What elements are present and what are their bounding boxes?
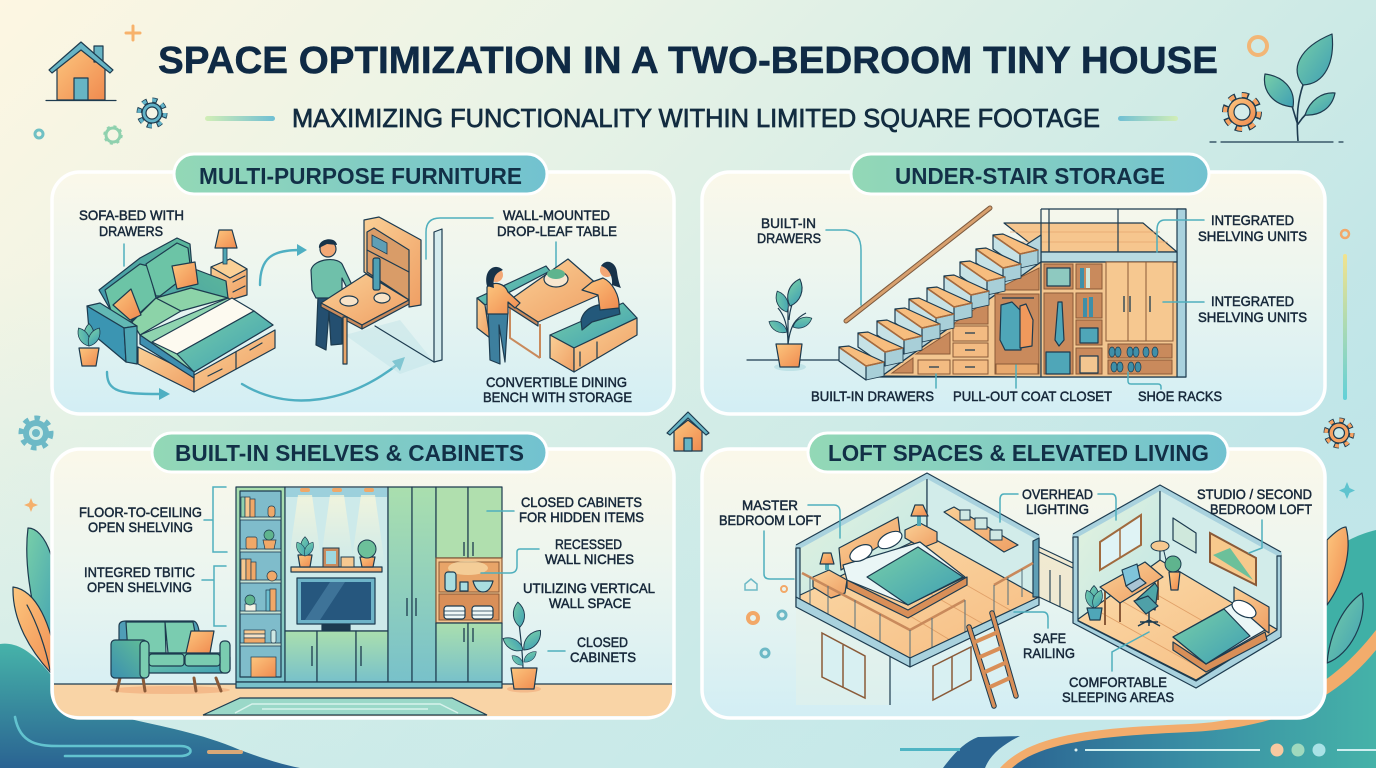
upper cabinets xyxy=(436,487,502,558)
icon: gear left xyxy=(21,418,51,448)
connecting bridge xyxy=(1039,547,1073,613)
icon: drop-leaf table xyxy=(321,258,409,364)
decorative bottom-left leaves xyxy=(13,528,60,680)
chair xyxy=(1134,583,1160,626)
bottom wave left xyxy=(0,644,300,768)
label: safe railing: SAFE xyxy=(1033,630,1066,646)
label: closed cabinets for hidden items: CLOSED CABINETS xyxy=(521,494,642,510)
connector studio xyxy=(1249,520,1262,553)
connector integrated 2 xyxy=(1163,301,1204,303)
plinth xyxy=(236,682,502,688)
bracket 2 xyxy=(202,566,226,626)
TV xyxy=(297,578,375,630)
heading pill: MULTI-PURPOSE FURNITURE xyxy=(199,163,522,189)
back nightstand and lamp xyxy=(905,505,937,548)
label: built-in drawers top: BUILT-IN xyxy=(761,215,816,231)
panel card xyxy=(702,172,1325,414)
title: SPACE OPTIMIZATION IN A TWO-BEDROOM TINY HOUSE xyxy=(158,40,1218,82)
floor line xyxy=(747,360,1186,377)
label: closed cabinets xyxy=(570,634,636,665)
label: studio / second bedroom loft: BEDROOM LOFT xyxy=(1210,501,1312,517)
decorative vertical bar xyxy=(1343,254,1347,400)
label: utilizing vertical wall space xyxy=(523,580,655,611)
label: wall-mounted table xyxy=(497,207,617,239)
bottom-left swoosh line xyxy=(15,717,190,756)
heading pill xyxy=(174,154,547,194)
icon: plus left xyxy=(24,498,38,512)
label: safe railing xyxy=(1023,630,1075,661)
panel: multi-purpose furniture xyxy=(52,154,674,414)
heading pill xyxy=(152,433,547,472)
alcove xyxy=(285,487,388,631)
panel card xyxy=(52,172,674,414)
panel: under-stair storage xyxy=(702,154,1325,414)
label: comfortable sleeping areas: COMFORTABLE xyxy=(1069,674,1167,690)
label: comfortable sleeping areas xyxy=(1062,674,1174,705)
label: integrated shelving 2: SHELVING UNITS xyxy=(1198,309,1307,325)
label: utilizing vertical wall space: WALL SPACE xyxy=(549,595,631,611)
label: master bedroom loft: BEDROOM LOFT xyxy=(719,512,821,528)
connector master 2 xyxy=(764,531,794,579)
label: convertible dining bench: BENCH WITH STORAGE xyxy=(483,389,632,405)
subtitle: MAXIMIZING FUNCTIONALITY WITHIN LIMITED SQUARE FOOTAGE xyxy=(292,103,1100,133)
bottom wave right xyxy=(900,630,1376,768)
rug xyxy=(203,698,487,715)
small icon cluster xyxy=(745,579,787,657)
label: studio / second bedroom loft: STUDIO / SECOND xyxy=(1197,486,1312,502)
label: integrated open shelving xyxy=(84,564,195,595)
icon: handrail xyxy=(846,208,990,321)
icon: sofa xyxy=(110,621,230,694)
icon: plant top-right xyxy=(1210,34,1343,142)
label: integrated shelving 2 xyxy=(1198,293,1307,325)
icon: ring top-right xyxy=(1249,37,1267,55)
label: overhead lighting: OVERHEAD xyxy=(1022,486,1093,502)
ladder xyxy=(969,613,1016,706)
floor line xyxy=(54,683,672,685)
icon: plus top-left xyxy=(126,26,140,40)
label: closed cabinets: CLOSED xyxy=(577,634,628,650)
icon: under-stair cabinets xyxy=(882,262,1177,377)
icon: green gear xyxy=(104,126,122,144)
icon: potted plant xyxy=(75,324,103,366)
icon: loft deck and railing xyxy=(865,209,1186,377)
label: shoe racks: SHOE RACKS xyxy=(1138,388,1222,404)
connector lighting xyxy=(1000,494,1116,522)
wall shelf xyxy=(944,507,1018,552)
icon: sofa bed xyxy=(87,238,275,392)
icon: small ring xyxy=(35,130,43,138)
tall cabinet xyxy=(388,487,436,682)
decorative bottom-right leaves xyxy=(1300,527,1376,768)
floor plant xyxy=(1083,586,1105,620)
label: convertible dining bench xyxy=(483,374,632,405)
label: integrated open shelving: INTEGRED TBITIC xyxy=(84,564,195,580)
connector table xyxy=(426,218,493,259)
label: safe railing: RAILING xyxy=(1023,645,1075,661)
label: closed cabinets: CABINETS xyxy=(570,649,636,665)
icon: ring right xyxy=(1341,230,1349,238)
label: closed cabinets for hidden items xyxy=(519,494,644,525)
front nightstand and lamp xyxy=(813,553,847,598)
desk xyxy=(1100,562,1163,625)
painting xyxy=(1210,533,1256,585)
connector closed cabinets xyxy=(487,510,514,512)
icon: woman right xyxy=(581,262,621,330)
label: convertible dining bench: CONVERTIBLE DINING xyxy=(486,374,627,390)
label: master bedroom loft: MASTER xyxy=(742,497,798,513)
panel card xyxy=(52,449,674,718)
back plant xyxy=(1151,541,1181,590)
heading pill: LOFT SPACES & ELEVATED LIVING xyxy=(828,440,1209,466)
second bedroom loft xyxy=(1073,485,1281,688)
recessed niche xyxy=(436,558,502,623)
icon: dining bench back xyxy=(477,266,550,338)
connector shoe racks xyxy=(1128,372,1161,389)
panel card xyxy=(702,449,1325,718)
lower right cabinets xyxy=(436,623,502,682)
label: integrated shelving 2: INTEGRATED xyxy=(1211,293,1294,309)
single bed xyxy=(1173,587,1269,672)
connector sofa xyxy=(123,244,125,266)
heading pill xyxy=(851,154,1209,194)
open shelf column xyxy=(236,487,285,682)
window xyxy=(1100,515,1141,570)
connector top drawers xyxy=(826,230,861,305)
floor band xyxy=(54,684,672,716)
connector closet xyxy=(1015,365,1017,388)
arrow 3 xyxy=(242,357,405,400)
label: integrated open shelving: OPEN SHELVING xyxy=(87,579,192,595)
icon: gear right xyxy=(1326,420,1352,446)
footer dots and line xyxy=(1074,744,1376,756)
label: overhead lighting: LIGHTING xyxy=(1026,501,1089,517)
label: built-in drawers bottom: BUILT-IN DRAWERS xyxy=(811,388,934,404)
subtitle flourish right xyxy=(1118,116,1178,121)
label: floor-to-ceiling xyxy=(79,504,202,535)
icon: orange gear xyxy=(1225,95,1259,129)
connector bench xyxy=(555,242,557,268)
label: recessed wall niches: RECESSED xyxy=(555,536,622,552)
bed xyxy=(839,517,967,618)
heading pill: BUILT-IN SHELVES & CABINETS xyxy=(175,440,524,466)
connector integrated 1 xyxy=(1157,220,1204,252)
heading pill xyxy=(808,433,1228,472)
label: recessed wall niches: WALL NICHES xyxy=(545,551,634,567)
icon: dining table xyxy=(507,259,606,358)
icon: woman left xyxy=(486,267,520,364)
connector master 1 xyxy=(808,505,840,538)
heading pill: UNDER-STAIR STORAGE xyxy=(895,163,1165,189)
connector niches xyxy=(481,549,539,573)
label: floor-to-ceiling: OPEN SHELVING xyxy=(88,519,193,535)
icon: plant xyxy=(767,277,814,371)
icon: staircase xyxy=(839,234,1038,380)
lower cabinets xyxy=(285,631,388,682)
icon: man at table xyxy=(311,239,352,350)
label: built-in drawers top xyxy=(757,215,821,246)
label: closed cabinets for hidden items: FOR HIDDEN ITEMS xyxy=(519,509,644,525)
label: integrated shelving 1: INTEGRATED xyxy=(1211,212,1294,228)
icon: star right xyxy=(1339,482,1355,499)
connector closed xyxy=(548,650,565,652)
icon: blue gear xyxy=(139,100,165,126)
label: wall-mounted table: WALL-MOUNTED xyxy=(503,207,610,223)
label: floor-to-ceiling: FLOOR-TO-CEILING xyxy=(79,504,202,520)
icon: house top-left xyxy=(46,42,116,100)
bottom dash xyxy=(207,750,243,754)
icon: plant xyxy=(500,602,545,692)
connector drawers xyxy=(935,374,937,388)
label: wall-mounted table: DROP-LEAF TABLE xyxy=(497,223,617,239)
label: pull-out coat closet: PULL-OUT COAT CLOSET xyxy=(953,388,1112,404)
safety railing xyxy=(802,563,1033,660)
lower level of master loft xyxy=(796,607,971,705)
panel: loft spaces & elevated living xyxy=(702,433,1325,718)
label: comfortable sleeping areas: SLEEPING AREAS xyxy=(1062,689,1174,705)
label: studio / second bedroom loft xyxy=(1197,486,1312,517)
connector railing xyxy=(1014,612,1048,628)
arrow 2 xyxy=(107,372,170,400)
panel: built-in shelves & cabinets xyxy=(52,433,674,718)
label: overhead lighting xyxy=(1022,486,1093,517)
icon: center house xyxy=(667,412,709,451)
label: sofa-bed xyxy=(79,207,184,239)
icon: built-in wall unit xyxy=(236,487,502,688)
icon: wall and shadow xyxy=(345,229,442,374)
label: master bedroom loft xyxy=(719,497,821,528)
label: built-in drawers top: DRAWERS xyxy=(757,230,821,246)
floating shelf with decor xyxy=(291,537,382,572)
label: sofa-bed: SOFA-BED WITH xyxy=(79,207,184,223)
icon: dining bench front xyxy=(550,303,637,372)
bracket 1 xyxy=(204,487,227,552)
connector sleeping xyxy=(1112,632,1149,671)
subtitle flourish left xyxy=(205,116,275,121)
icon: side table with lamp xyxy=(211,230,247,300)
label: recessed wall niches xyxy=(545,536,634,567)
arrow 1 xyxy=(260,244,307,285)
poster xyxy=(1173,518,1196,553)
label: sofa-bed: DRAWERS xyxy=(99,223,163,239)
master bedroom loft xyxy=(796,473,1039,667)
label: integrated shelving 1: SHELVING UNITS xyxy=(1198,228,1307,244)
icon: wall cabinet xyxy=(364,217,421,307)
label: utilizing vertical wall space: UTILIZING VERTICAL xyxy=(523,580,655,596)
label: integrated shelving 1 xyxy=(1198,212,1307,244)
